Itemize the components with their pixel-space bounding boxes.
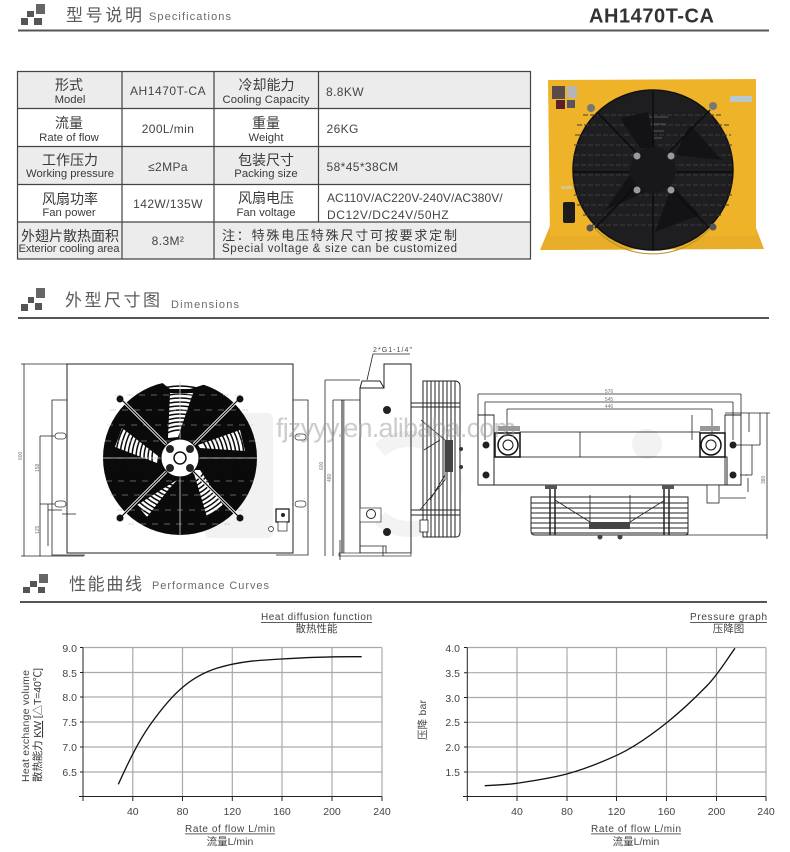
row: fan power and fan voltage: 风扇功率 [42, 191, 98, 207]
row: exterior cooling area and note: 注：特殊电压特殊尺寸可按要求定制 [222, 228, 457, 243]
row: model and cooling capacity: Model [55, 94, 85, 106]
section header: specifications: Specifications [149, 11, 232, 23]
fan grille side [411, 381, 463, 537]
row: fan power and fan voltage: Fan voltage [236, 207, 296, 219]
row: rate of flow and weight: 流量 [55, 115, 83, 131]
row: rate of flow and weight: 200L/min [142, 122, 194, 136]
drawing: front view: 125 [35, 525, 41, 534]
drawing: top view: 380 [761, 475, 767, 484]
chart: heat diffusion function: 8.0 [62, 692, 77, 704]
row: fan power and fan voltage [42, 190, 503, 222]
chart: pressure graph: 80 [561, 806, 573, 818]
row: fan power and fan voltage: AC110V/AC220V-240V/AC380V/ [327, 191, 503, 205]
chart title: Heat diffusion function [261, 612, 372, 623]
x axis label: Rate of flow L/min [591, 824, 681, 835]
chart title: 散热性能 [296, 622, 338, 635]
row: rate of flow and weight: Rate of flow [39, 132, 100, 144]
row: rate of flow and weight: Weight [249, 132, 284, 144]
curve [118, 657, 362, 784]
model title: AH1470T-CA [589, 6, 714, 28]
chart: pressure graph: 1.5 [445, 767, 460, 779]
row: working pressure and packing size: 58*45*38CM [326, 160, 399, 174]
fan with grille [573, 90, 733, 254]
row: model and cooling capacity: 冷却能力 [238, 77, 294, 93]
fan front view [103, 379, 258, 536]
drawing: front view: 600 [18, 451, 24, 460]
chart: heat diffusion function: 7.5 [62, 717, 77, 729]
specifications table [18, 72, 530, 259]
row: fan power and fan voltage: DC12V/DC24V/50HZ [327, 208, 449, 222]
chart: pressure graph: 3.0 [445, 693, 460, 705]
chart title [261, 612, 372, 635]
chart: pressure graph: 40 [511, 806, 523, 818]
row: working pressure and packing size: 工作压力 [42, 152, 98, 168]
chart: pressure graph: 120 [608, 806, 625, 818]
drawing: front view [18, 364, 308, 556]
drawing: top view [478, 389, 770, 540]
section header: performance curves: 性能曲线 [69, 575, 142, 594]
row: exterior cooling area and note: 8.3M² [152, 234, 184, 248]
x axis label: 流量L/min [613, 835, 659, 848]
chart: heat diffusion function: 6.5 [62, 767, 77, 779]
chart: heat diffusion function: 8.5 [62, 668, 77, 680]
row: working pressure and packing size: ≤2MPa [148, 160, 188, 174]
left pipe fitting [482, 426, 520, 478]
connector switch [563, 202, 575, 223]
chart: heat diffusion function [20, 612, 391, 848]
row: working pressure and packing size: Packing size [234, 168, 298, 180]
row: model and cooling capacity: Cooling Capacity [222, 94, 310, 106]
chart: heat diffusion function: 120 [224, 806, 241, 818]
y axis label: 压降 bar [416, 700, 429, 740]
x axis label [185, 824, 275, 848]
chart title [690, 612, 767, 635]
row: working pressure and packing size: 包装尺寸 [238, 152, 294, 168]
watermark shapes [205, 413, 662, 538]
chart: pressure graph [416, 612, 775, 848]
chart: heat diffusion function: 7.0 [62, 742, 77, 754]
warning labels [552, 86, 752, 189]
row: model and cooling capacity: 8.8KW [326, 85, 364, 99]
fan grille top [531, 485, 688, 540]
right pipe fitting [700, 426, 736, 478]
row: rate of flow and weight: 26KG [326, 122, 359, 136]
x axis label: Rate of flow L/min [185, 824, 275, 835]
section header: dimensions [18, 288, 769, 319]
section header: specifications [18, 4, 769, 32]
section header: dimensions: Dimensions [171, 299, 240, 311]
chart: pressure graph: 2.0 [445, 742, 460, 754]
y axis label [20, 668, 44, 782]
row: model and cooling capacity [55, 77, 364, 106]
y axis label: 散热能力 KW [△T=40℃] [31, 668, 44, 782]
drawing: top view: 576 [605, 389, 613, 395]
chart: pressure graph: 160 [658, 806, 675, 818]
chart: pressure graph: 200 [708, 806, 725, 818]
curve [485, 648, 735, 786]
row: exterior cooling area and note: 外翅片散热面积 [21, 228, 119, 244]
connector box [268, 509, 289, 532]
chart: pressure graph: 240 [757, 806, 775, 818]
product photo: yellow fan cooler [540, 79, 764, 254]
row: exterior cooling area and note [18, 228, 457, 255]
row: model and cooling capacity: 形式 [55, 77, 83, 93]
drawing: side view: 480 [327, 473, 333, 482]
chart: heat diffusion function: 80 [177, 806, 188, 818]
row: working pressure and packing size [26, 152, 399, 180]
row: rate of flow and weight: 重量 [252, 115, 280, 131]
section header: specifications: 型号说明 [66, 6, 142, 25]
y axis label: Heat exchange volume [20, 670, 32, 782]
chart title: Pressure graph [690, 612, 767, 623]
chart: pressure graph: 4.0 [445, 643, 460, 655]
drawing: front view: 158 [35, 463, 41, 472]
chart: pressure graph: 2.5 [445, 717, 460, 729]
drawing: side view [319, 347, 463, 560]
x axis label [591, 824, 681, 848]
watermark text: fjzyyy.en.alibaba.com [276, 413, 516, 443]
row: exterior cooling area and note: Exterior cooling area [18, 243, 120, 255]
chart: heat diffusion function: 200 [323, 806, 341, 818]
chart: heat diffusion function: 9.0 [62, 643, 77, 655]
chart: pressure graph: 3.5 [445, 668, 460, 680]
drawing: top view: 446 [605, 404, 613, 410]
section header: dimensions: 外型尺寸图 [65, 291, 160, 310]
row: fan power and fan voltage: Fan power [42, 207, 96, 219]
drawing: side view: 600 [319, 461, 325, 470]
row: fan power and fan voltage: 风扇电压 [238, 190, 294, 206]
pipe size label [367, 347, 412, 380]
chart: heat diffusion function: 240 [373, 806, 391, 818]
row: rate of flow and weight [39, 115, 359, 144]
row: fan power and fan voltage: 142W/135W [133, 197, 203, 211]
row: model and cooling capacity: AH1470T-CA [130, 84, 206, 98]
row: exterior cooling area and note: Special voltage & size can be customized [222, 243, 457, 255]
section header: performance curves: Performance Curves [152, 580, 270, 592]
section header: performance curves [20, 574, 767, 603]
chart: heat diffusion function: 40 [127, 806, 139, 818]
drawing: top view: 545 [605, 397, 613, 403]
x axis label: 流量L/min [207, 835, 253, 848]
pipe size label: 2*G1-1/4" [373, 347, 412, 354]
chart title: 压降图 [713, 622, 744, 635]
chart: heat diffusion function: 160 [273, 806, 291, 818]
row: working pressure and packing size: Working pressure [26, 168, 114, 180]
